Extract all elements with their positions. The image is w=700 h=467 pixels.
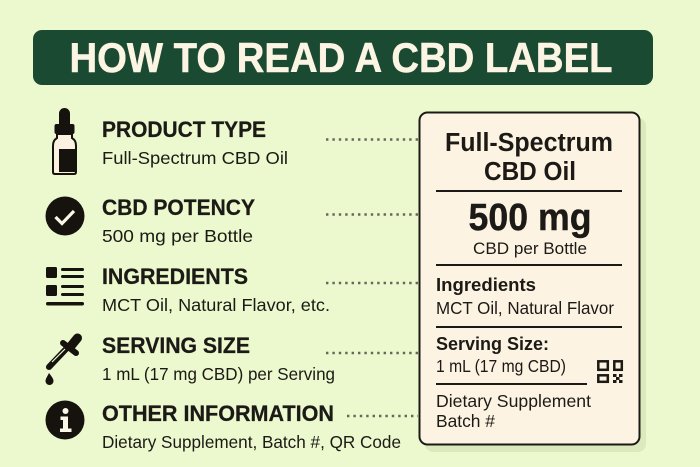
label: other information (436, 391, 591, 431)
text: product type detail: Full-Spectrum CBD Oil (102, 148, 288, 168)
label: potency (468, 197, 592, 258)
text: ingredients detail: MCT Oil, Natural Flavor, etc. (102, 295, 330, 315)
dotted leader: cbd potency (326, 213, 418, 216)
row: cbd potency (46, 195, 255, 246)
icon: qr code (598, 361, 622, 383)
heading: cbd potency: CBD POTENCY (102, 195, 255, 220)
label: other information: Dietary Supplement (436, 391, 591, 411)
icon: list (46, 267, 84, 306)
text: serving size detail: 1 mL (17 mg CBD) per Serving (102, 364, 335, 384)
label: serving size (436, 334, 566, 376)
row: serving size (46, 333, 335, 385)
dotted leader: serving size (326, 352, 418, 354)
text: cbd potency detail: 500 mg per Bottle (102, 226, 253, 246)
label: potency: CBD per Bottle (473, 239, 587, 258)
label: product name: Full-Spectrum (445, 129, 613, 157)
label: ingredients: MCT Oil, Natural Flavor (436, 298, 614, 318)
text: other information detail: Dietary Supplement, Batch #, QR Code (102, 432, 401, 452)
panel: product label (420, 112, 646, 452)
label: product name (445, 129, 613, 186)
row: ingredients (46, 264, 330, 315)
row: product type (53, 108, 288, 174)
dotted leader: other information (347, 415, 418, 417)
label: other information: Batch # (436, 411, 495, 431)
heading: serving size: SERVING SIZE (102, 333, 250, 358)
icon: info badge (46, 400, 84, 440)
label: product name: CBD Oil (484, 158, 576, 186)
row: other information (46, 400, 401, 452)
dotted leader: product type (326, 138, 418, 141)
heading: other information: OTHER INFORMATION (102, 401, 334, 426)
title banner: HOW TO READ A CBD LABEL (70, 34, 612, 81)
label: ingredients (436, 275, 614, 318)
icon: dropper bottle (53, 108, 76, 174)
label: serving size: Serving Size: (436, 334, 549, 354)
icon: check badge (46, 196, 84, 236)
dotted leader: ingredients (326, 282, 418, 284)
label: serving size: 1 mL (17 mg CBD) (436, 356, 566, 376)
label: potency: 500 mg (468, 197, 592, 239)
icon: dropper (46, 338, 78, 385)
heading: product type: PRODUCT TYPE (102, 117, 266, 142)
heading: ingredients: INGREDIENTS (102, 264, 248, 289)
label: ingredients: Ingredients (436, 275, 536, 295)
